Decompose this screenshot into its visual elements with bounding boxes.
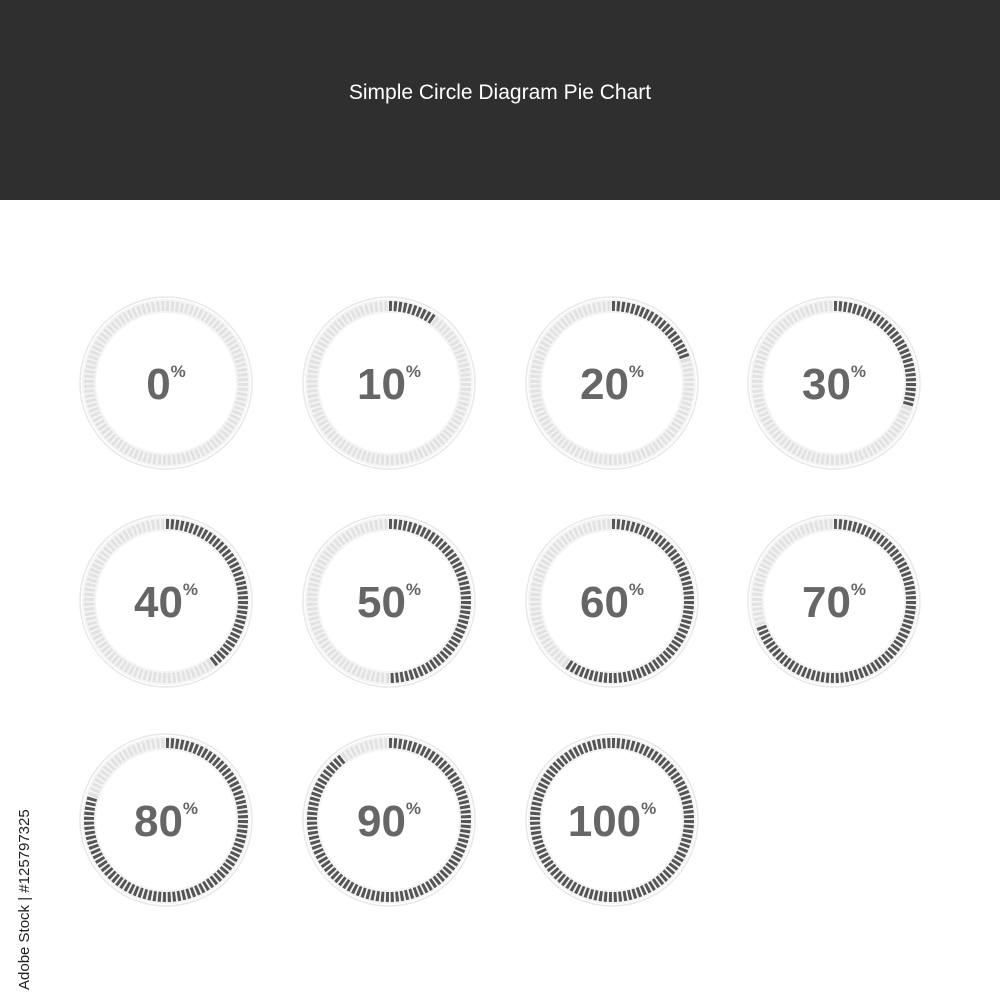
chart: 100%: % — [641, 799, 656, 818]
chart: 10% — [303, 297, 475, 469]
chart: 90% — [303, 734, 475, 906]
chart: 60%: 60 — [580, 578, 629, 627]
chart: 50%: 50 — [357, 578, 406, 627]
chart: 20%: 20 — [580, 360, 629, 409]
chart: 70%: % — [851, 580, 866, 599]
chart: 20%: % — [629, 362, 644, 381]
chart: 80%: % — [183, 799, 198, 818]
chart: 60% — [526, 515, 698, 687]
header band — [0, 0, 1000, 200]
chart: 40%: % — [183, 580, 198, 599]
chart: 70%: 70 — [802, 578, 851, 627]
chart: 90%: % — [406, 799, 421, 818]
chart: 30% — [748, 297, 920, 469]
chart: 50% — [303, 515, 475, 687]
chart: 40% — [80, 515, 252, 687]
chart: 0% — [80, 297, 252, 469]
chart: 100%: 100 — [568, 797, 641, 846]
chart: 70% — [748, 515, 920, 687]
chart: 80%: 80 — [134, 797, 183, 846]
chart: 60%: % — [629, 580, 644, 599]
chart: 40%: 40 — [134, 578, 183, 627]
chart: 0%: % — [171, 362, 186, 381]
title: Simple Circle Diagram Pie Chart — [349, 81, 651, 104]
chart: 100% — [526, 734, 698, 906]
side stock id text: Adobe Stock | #125797325 — [16, 809, 33, 990]
chart: 30%: 30 — [802, 360, 851, 409]
chart: 90%: 90 — [357, 797, 406, 846]
chart: 10%: % — [406, 362, 421, 381]
chart: 50%: % — [406, 580, 421, 599]
chart: 20% — [526, 297, 698, 469]
chart: 80% — [80, 734, 252, 906]
chart: 10%: 10 — [357, 360, 406, 409]
chart: 0%: 0 — [146, 360, 171, 409]
chart: 30%: % — [851, 362, 866, 381]
